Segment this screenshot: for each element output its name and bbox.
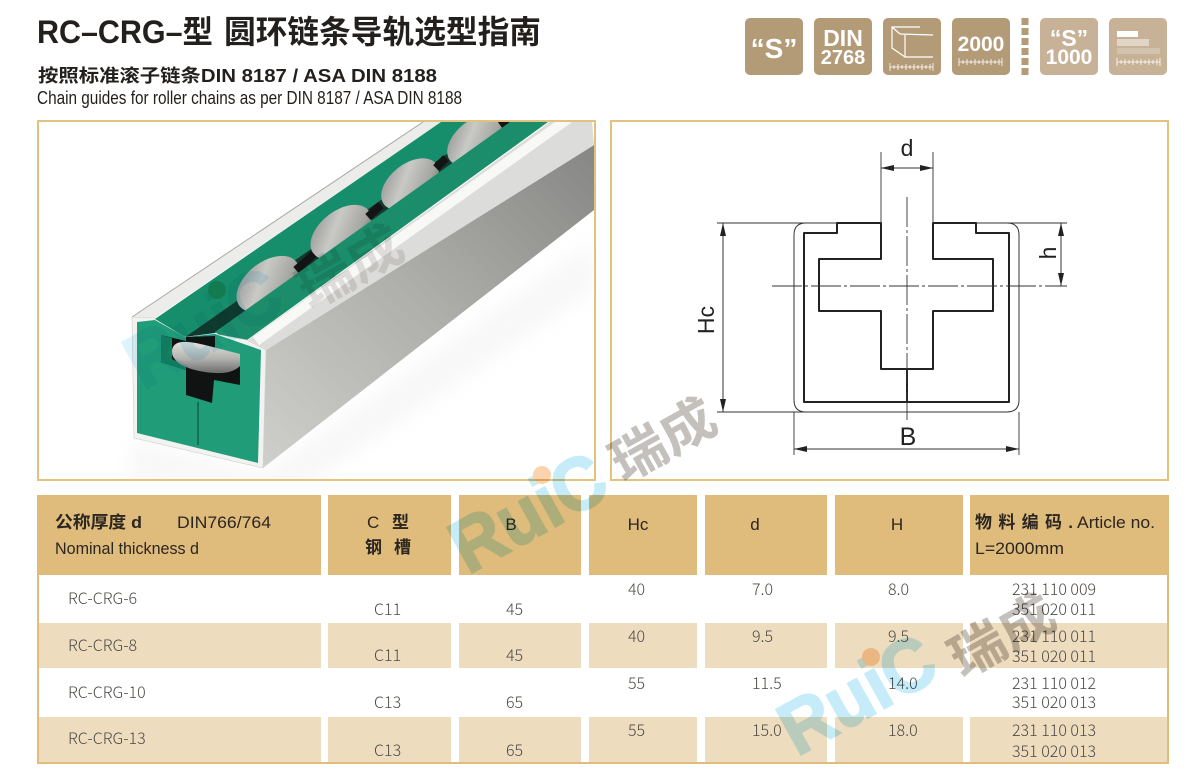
dimension h [1035,223,1064,286]
subtitle chinese: 按照标准滚子链条DIN 8187 / ASA DIN 8188 [38,65,437,86]
icon: 2000: 2000 [958,33,1004,56]
front chain link [172,342,240,373]
title: RC–CRG–型 [37,14,213,50]
header labels: Article no. [1077,513,1155,532]
row RC-CRG-6 [68,576,1096,620]
row RC-CRG-10: RC-CRG-10 [68,679,146,703]
rail illustration [132,122,594,468]
top right flange [248,122,594,350]
row RC-CRG-6: 8.0 [888,576,909,600]
icon: S [745,18,803,75]
watermark: table [764,584,1066,771]
watermark: table: RuiC [764,617,950,771]
header labels: d [750,515,760,534]
title [37,14,541,50]
title: 圆环链条导轨选型指南 [224,14,541,50]
header labels [55,512,1155,558]
row RC-CRG-6: 40 [628,576,645,600]
icon: S 1000: 1000 [1046,46,1092,69]
icon row [745,18,1167,75]
icon: S 1000 [1040,18,1098,75]
row RC-CRG-10: 14.0 [888,670,918,694]
header labels: 型 [392,513,409,532]
watermark: photo: 瑞成 [288,215,414,320]
row RC-CRG-10: 231 110 012 [1012,670,1096,694]
dimension Hc: Hc [693,306,719,334]
header labels: B [505,515,517,534]
beige rows [39,623,1167,762]
icon: DIN 2768: DIN [823,25,863,51]
header labels: C [367,513,379,532]
green left strip [155,122,492,337]
row RC-CRG-8: 40 [628,623,645,647]
inner profile [804,223,1009,402]
icon: channel with ruler [883,18,941,75]
row RC-CRG-10 [68,670,1096,713]
row RC-CRG-13 [68,717,1096,762]
front white frame [132,317,266,468]
center lines [772,197,1067,420]
row RC-CRG-10: 65 [506,689,523,713]
row RC-CRG-13: 65 [506,737,523,761]
row RC-CRG-8: 351 020 011 [1012,643,1096,667]
outer channel outline [794,223,1019,412]
silver side face [263,145,594,468]
table frame [38,495,1168,763]
icon: S: “S” [751,33,797,64]
icon: DIN 2768 [814,18,872,75]
dimension d [881,135,933,171]
dimension Hc [693,223,726,412]
row RC-CRG-8: RC-CRG-8 [68,632,137,656]
header labels: 钢 槽 [365,538,411,557]
row RC-CRG-8: 9.5 [752,623,773,647]
chain links [236,122,510,310]
dimension d: d [901,135,913,161]
extension lines [717,152,1067,455]
icon: 2000 [952,18,1010,75]
data table [37,495,1168,763]
row RC-CRG-6: 231 110 009 [1012,576,1096,600]
watermark: photo: RuiC [110,250,296,404]
row RC-CRG-6: C11 [374,596,401,620]
row RC-CRG-13: 55 [628,717,645,741]
dotted separator [1022,18,1028,75]
row RC-CRG-8: C11 [374,642,401,666]
row RC-CRG-8: 231 110 011 [1012,623,1096,647]
row RC-CRG-8: 9.5 [888,623,909,647]
header labels: 公称厚度 d [55,513,142,532]
green front face [137,320,261,463]
watermark: photo [110,215,414,404]
dimension h: h [1035,247,1061,259]
icon: stacked bars with ruler [1109,18,1167,75]
watermark: centre: RuiC [435,435,621,589]
dimension B [794,423,1019,452]
subtitle english: Chain guides for roller chains as per DIN 8187 / ASA DIN 8188 [37,88,462,108]
panel: product photo [38,104,595,490]
row RC-CRG-13: 15.0 [752,717,782,741]
row RC-CRG-6: 45 [506,596,523,620]
top left flange [132,122,441,318]
row RC-CRG-8 [68,623,1096,667]
panel: dimension drawing [611,121,1168,480]
row RC-CRG-8: 45 [506,642,523,666]
watermark: centre: 瑞成 [601,388,727,493]
row RC-CRG-13: C13 [374,737,401,761]
row RC-CRG-6: RC-CRG-6 [68,585,137,609]
dimension B: B [900,423,916,451]
watermark: table: 瑞成 [940,584,1066,689]
chain slot cutout [161,335,240,403]
header labels: 物 料 编 码 . [975,512,1073,532]
row RC-CRG-13: 231 110 013 [1012,717,1096,741]
row RC-CRG-6: 7.0 [752,576,773,600]
row RC-CRG-10: 351 020 013 [1012,689,1096,713]
green right strip top [215,122,548,340]
row RC-CRG-13: 351 020 013 [1012,738,1096,762]
row RC-CRG-13: 18.0 [888,717,918,741]
row RC-CRG-10: 55 [628,670,645,694]
slot shadow [185,153,453,337]
row RC-CRG-10: 11.5 [752,670,782,694]
header labels: Hc [628,515,649,534]
watermark: centre [435,388,727,589]
header labels: L=2000mm [975,539,1064,558]
header labels: DIN766/764 [177,513,271,532]
header labels: Nominal thickness d [55,539,199,558]
header labels: H [891,515,903,534]
table header [37,495,1168,575]
row RC-CRG-10: C13 [374,689,401,713]
icon: DIN 2768: 2768 [821,47,865,69]
icon: S 1000: “S” [1050,25,1088,51]
row RC-CRG-13: RC-CRG-13 [68,725,146,749]
shadow [130,240,594,490]
row RC-CRG-6: 351 020 011 [1012,596,1096,620]
